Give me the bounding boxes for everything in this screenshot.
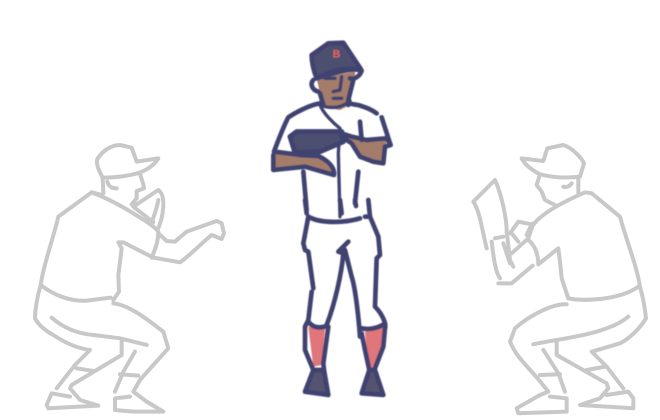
right forearm	[342, 133, 391, 163]
jersey side lines	[303, 172, 358, 210]
facial features	[325, 77, 342, 98]
upper body	[273, 43, 391, 217]
left leg	[303, 217, 328, 370]
inseams	[327, 242, 360, 337]
skin: arms	[273, 133, 387, 175]
cap brim	[317, 69, 362, 79]
cap	[97, 145, 158, 178]
shoulders and sleeves	[274, 103, 390, 152]
illustration: right grey crouching coach with clipboard	[473, 145, 646, 413]
cap	[312, 43, 361, 78]
illustration: left grey crouching catcher	[35, 145, 224, 412]
extended arm	[113, 221, 224, 300]
hand	[495, 222, 532, 263]
glove	[290, 132, 343, 153]
ear and jaw	[312, 80, 353, 105]
torso	[533, 192, 646, 388]
face	[103, 173, 144, 204]
shoes	[305, 370, 383, 395]
torso	[35, 192, 158, 388]
face	[537, 174, 578, 205]
illustration: center pitcher	[273, 43, 391, 395]
clipboard	[473, 180, 513, 278]
lower body	[303, 200, 385, 395]
skin: face and neck	[317, 72, 355, 110]
jersey bottom	[305, 200, 370, 217]
cap logo: B	[333, 48, 341, 60]
legs and shoes	[510, 304, 633, 413]
collar and placket	[320, 101, 350, 217]
raised glove	[133, 190, 163, 228]
legs and shoes	[47, 303, 168, 412]
cap	[522, 145, 584, 178]
left forearm	[273, 152, 334, 175]
belt hem	[308, 217, 360, 222]
socks	[308, 327, 385, 368]
right leg	[362, 217, 385, 370]
arm	[498, 223, 568, 298]
